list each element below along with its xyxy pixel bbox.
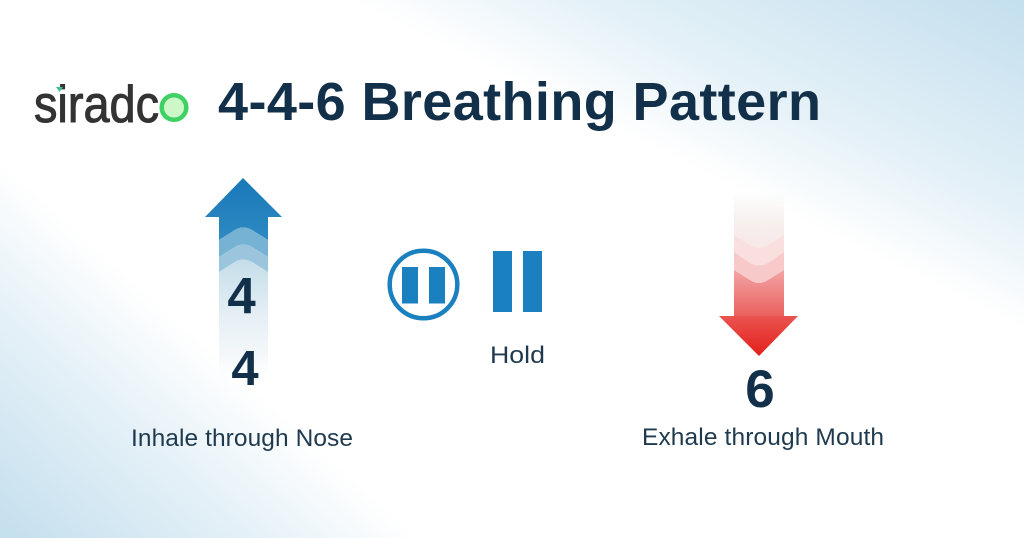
exhale column xyxy=(642,192,884,451)
inhale column xyxy=(131,178,353,452)
number 4 upper: 4 xyxy=(227,267,256,324)
label: hold: Hold xyxy=(490,342,545,369)
label: exhale: Exhale through Mouth xyxy=(642,424,884,451)
icon: up arrow xyxy=(205,178,282,378)
number 4 lower: 4 xyxy=(231,342,259,396)
icon: down arrow xyxy=(719,192,798,356)
label: inhale: Inhale through Nose xyxy=(131,425,353,452)
number 6: 6 xyxy=(745,360,775,419)
icon: pause bars xyxy=(493,251,542,312)
logo: siradco: siradc xyxy=(34,76,159,134)
icon: pause in circle xyxy=(390,251,457,318)
logo: teal dot xyxy=(56,87,63,92)
logo: green o xyxy=(162,95,186,120)
hold column xyxy=(390,251,545,369)
title: 4-4-6 Breathing Pattern xyxy=(218,72,821,132)
